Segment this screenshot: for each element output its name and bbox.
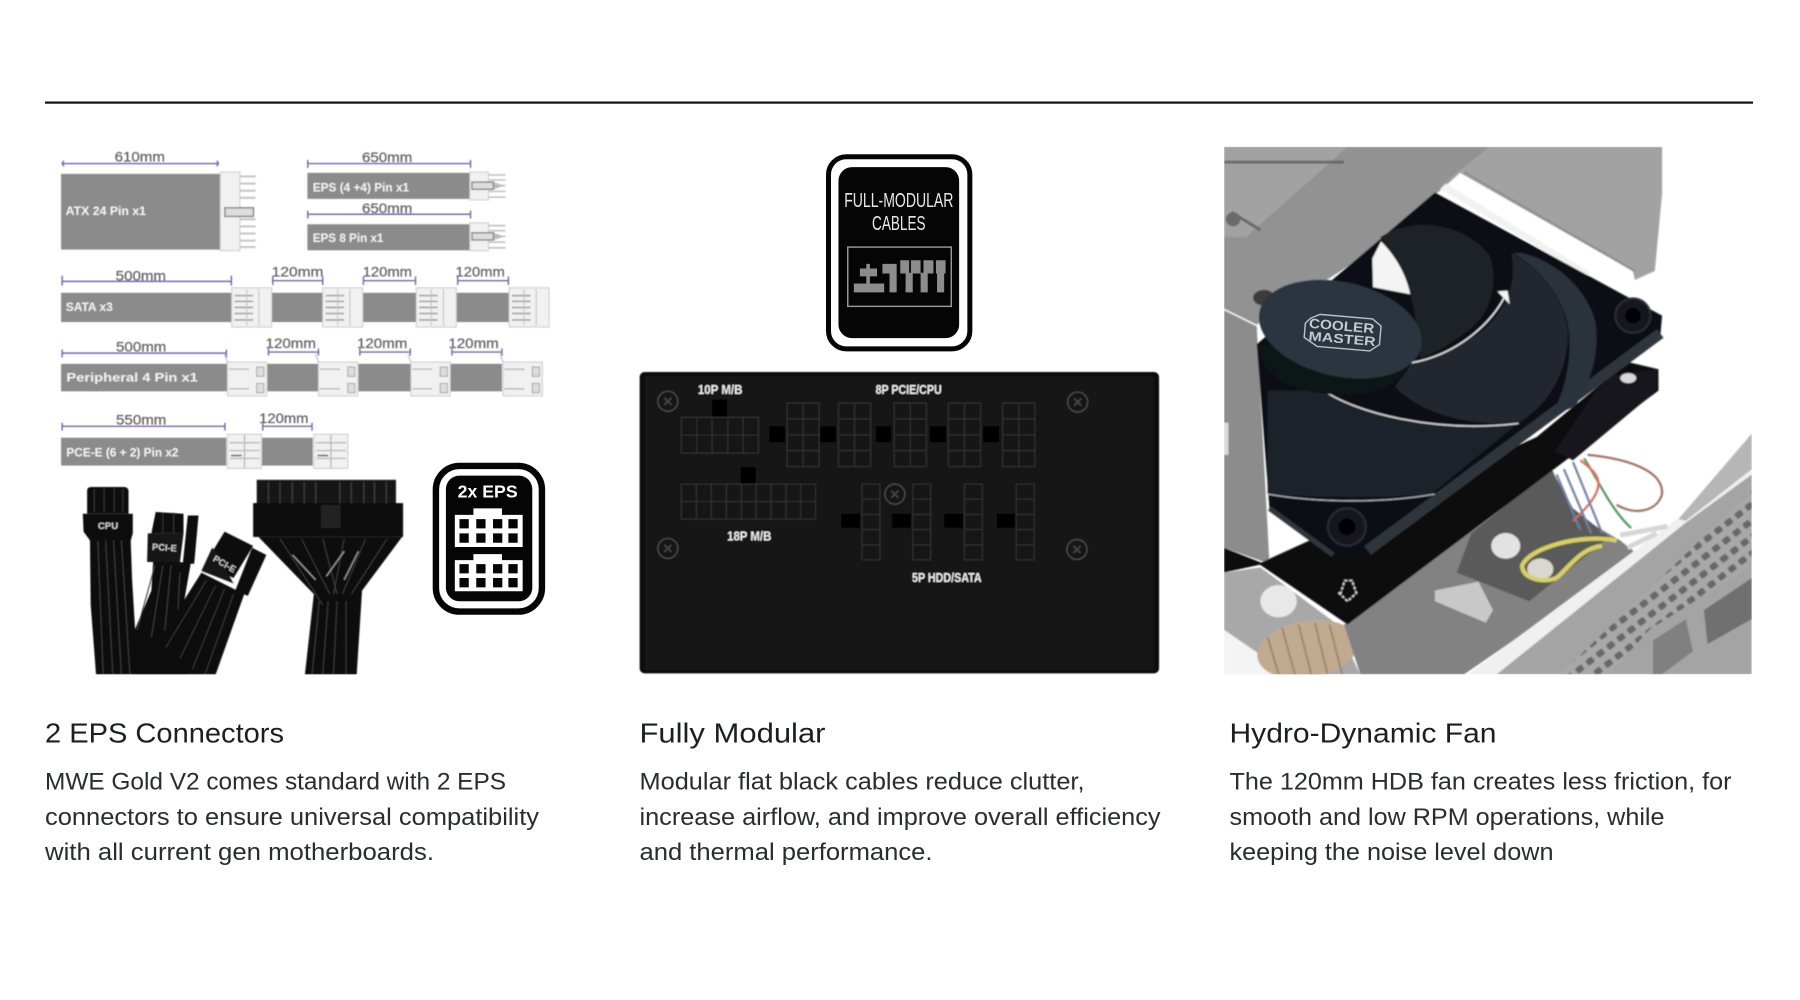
PCI-E cable one <box>132 512 199 674</box>
column 3 body text <box>1230 768 1732 866</box>
label: 18P M/B socket: 18P M/B <box>727 529 771 544</box>
icon: 2x EPS badge <box>436 466 542 612</box>
peripheral 4 pin cable: 120mm <box>266 336 316 352</box>
logo: Cooler Master <box>1303 313 1382 352</box>
logo: Cooler Master: COOLER <box>1308 316 1375 336</box>
icon: 2x EPS badge: 2x EPS <box>458 482 518 502</box>
EPS 8 pin cable: EPS 8 Pin x1 <box>313 231 384 245</box>
SATA cable: 500mm <box>116 268 166 284</box>
PCI-E cable two: PCI-E <box>211 554 238 575</box>
panel: 2 EPS cable diagram and photo <box>61 149 549 674</box>
ATX 24 pin connector and wires <box>253 480 403 674</box>
SATA cable: 120mm <box>363 264 412 280</box>
CPU cable: CPU <box>98 521 118 532</box>
panel: hydro-dynamic fan photo <box>1224 147 1752 686</box>
SATA cable: 120mm <box>272 264 323 280</box>
column 2 body text: and thermal performance. <box>640 839 932 866</box>
PCI-E 6+2 pin cable <box>61 411 348 468</box>
peripheral 4 pin cable: Peripheral 4 Pin x1 <box>66 370 198 384</box>
photo: black modular cables with connectors <box>83 480 403 674</box>
SATA cable: 120mm <box>456 264 505 280</box>
label: 8P PCIE/CPU sockets <box>769 382 1035 467</box>
wires <box>1522 455 1668 580</box>
top divider rule <box>45 102 1753 104</box>
column 1 body text: connectors to ensure universal compatibility <box>45 804 539 831</box>
label: 8P PCIE/CPU sockets: 8P PCIE/CPU <box>876 382 942 397</box>
column 1 heading: 2 EPS Connectors <box>45 718 284 748</box>
column 2 body text: increase airflow, and improve overall efficiency <box>640 804 1160 831</box>
label: 10P M/B socket <box>681 382 759 453</box>
peripheral 4 pin cable: 500mm <box>116 339 166 355</box>
PCI-E cable one: PCI-E <box>152 542 177 554</box>
panel: fully modular <box>640 157 1159 673</box>
EPS 4+4 pin cable: 650mm <box>362 150 412 166</box>
column 3 body text: keeping the noise level down <box>1230 839 1554 866</box>
icon: full-modular cables badge: FULL-MODULAR <box>844 190 953 212</box>
column 3 body text: smooth and low RPM operations, while <box>1230 804 1664 831</box>
PCI-E 6+2 pin cable: 550mm <box>116 413 166 429</box>
cable length diagram <box>61 149 549 468</box>
metal top plate <box>1224 147 1662 573</box>
column 2 heading: Fully Modular <box>640 718 826 748</box>
column 1 body text <box>44 768 539 866</box>
column 1 body text: MWE Gold V2 comes standard with 2 EPS <box>45 768 506 796</box>
column 2 body text <box>640 768 1160 866</box>
icon: full-modular cables badge: CABLES <box>872 213 926 235</box>
photo: PSU back panel with modular sockets <box>640 372 1159 673</box>
fan blades <box>1268 225 1597 501</box>
fan housing <box>1257 192 1662 557</box>
screws <box>658 391 1088 559</box>
column 1 body text: with all current gen motherboards. <box>44 839 434 866</box>
label: 18P M/B socket <box>681 467 816 544</box>
EPS 8 pin cable: 650mm <box>362 201 412 217</box>
PCI-E cable two <box>137 532 266 674</box>
peripheral 4 pin cable: 120mm <box>448 336 499 352</box>
column 3 heading: Hydro-Dynamic Fan <box>1230 718 1496 748</box>
SATA cable: SATA x3 <box>66 300 113 314</box>
logo: Cooler Master: MASTER <box>1308 328 1377 349</box>
PCI-E 6+2 pin cable: PCE-E (6 + 2) Pin x2 <box>66 445 179 459</box>
column 2 body text: Modular flat black cables reduce clutter, <box>640 768 1084 796</box>
PCI-E 6+2 pin cable: 120mm <box>259 411 308 427</box>
fan hub <box>1258 279 1422 396</box>
SATA cable <box>61 264 549 327</box>
ATX 24 pin cable: ATX 24 Pin x1 <box>66 204 146 218</box>
icon: full-modular cables badge <box>828 157 970 349</box>
EPS 4+4 pin cable: EPS (4 +4) Pin x1 <box>313 180 409 194</box>
ATX 24 pin cable <box>61 149 256 251</box>
label: 5P HDD/SATA sockets <box>841 484 1034 585</box>
CPU cable <box>83 487 138 674</box>
label: 5P HDD/SATA sockets: 5P HDD/SATA <box>912 570 982 585</box>
PSU interior and chassis <box>1224 433 1752 686</box>
EPS 4+4 pin cable <box>307 150 506 200</box>
label: 10P M/B socket: 10P M/B <box>698 382 742 397</box>
column 3 body text: The 120mm HDB fan creates less friction, for <box>1230 768 1732 796</box>
EPS 8 pin cable <box>307 201 506 251</box>
ATX 24 pin cable: 610mm <box>115 149 165 165</box>
fan lower frame plate <box>1259 362 1658 624</box>
peripheral 4 pin cable <box>61 336 542 396</box>
peripheral 4 pin cable: 120mm <box>357 336 407 352</box>
